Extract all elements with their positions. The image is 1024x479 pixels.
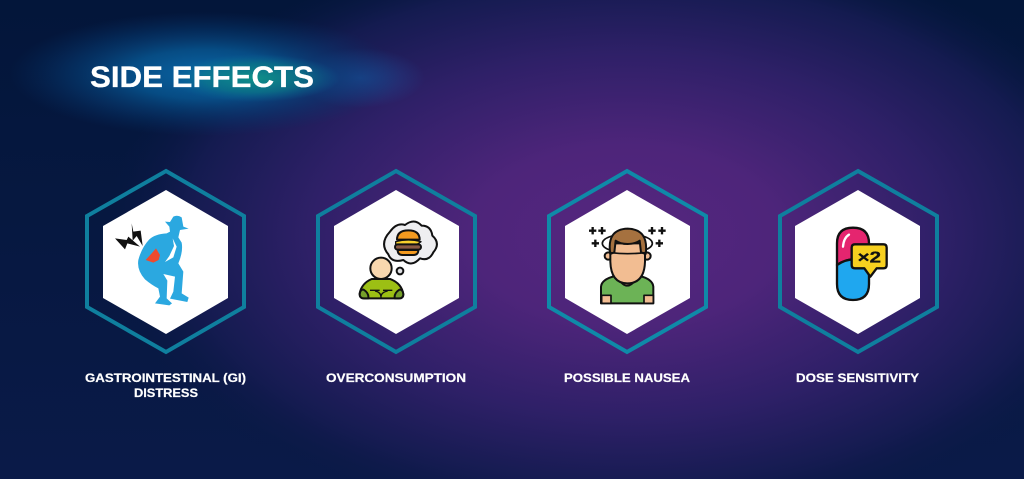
panel: gastrointestinal distress bbox=[85, 171, 246, 400]
label: DISTRESS bbox=[134, 386, 198, 400]
hexagon frame bbox=[549, 171, 706, 352]
hexagon frame bbox=[780, 171, 937, 352]
label: POSSIBLE NAUSEA bbox=[564, 371, 690, 385]
label: DOSE SENSITIVITY bbox=[796, 371, 919, 385]
title: SIDE EFFECTS bbox=[90, 61, 314, 94]
label: OVERCONSUMPTION bbox=[326, 371, 466, 385]
panel: dose sensitivity bbox=[780, 171, 937, 385]
panel: overconsumption bbox=[318, 171, 475, 385]
white hexagon bbox=[565, 190, 690, 334]
white hexagon bbox=[334, 190, 459, 334]
label bbox=[85, 371, 246, 400]
icon: person clutching stomach bbox=[115, 216, 189, 305]
white hexagon bbox=[103, 190, 228, 334]
label: GASTROINTESTINAL (GI) bbox=[85, 371, 246, 385]
icon: person thinking of burger bbox=[360, 221, 437, 298]
badge text: ×2 bbox=[858, 249, 881, 266]
icon: capsule with x2 badge bbox=[837, 228, 887, 300]
hexagon frame bbox=[87, 171, 244, 352]
white hexagon bbox=[795, 190, 920, 334]
panel: possible nausea bbox=[549, 171, 706, 385]
icon: dizzy man bbox=[589, 227, 666, 303]
hexagon frame bbox=[318, 171, 475, 352]
